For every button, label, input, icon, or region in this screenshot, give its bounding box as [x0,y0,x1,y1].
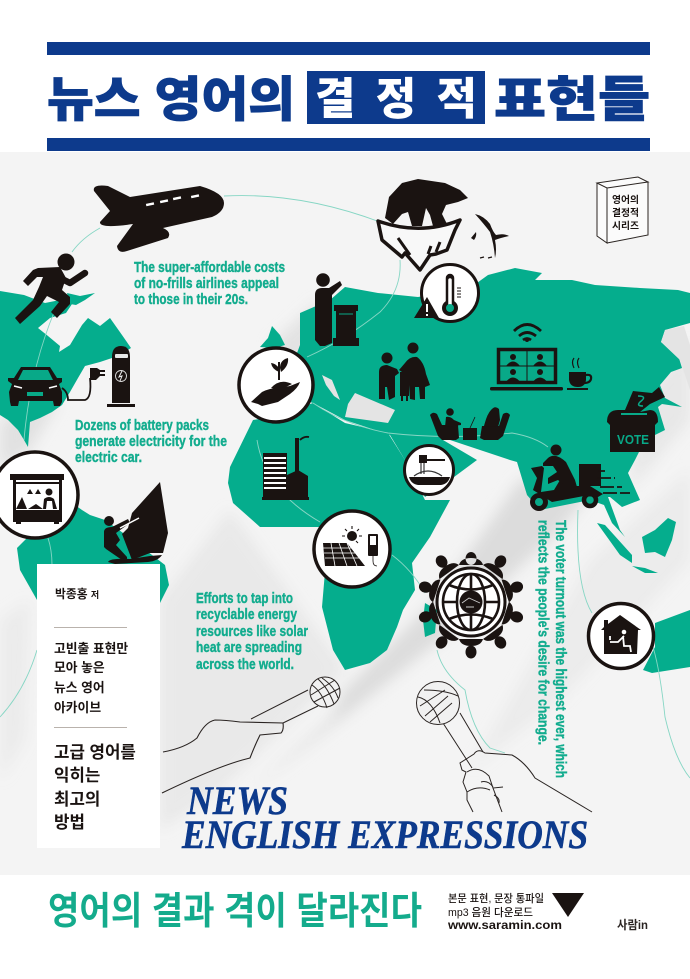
icon: vote box: VOTE [617,433,649,447]
series book: 시리즈 [612,220,639,232]
caption: electric car: generate electricity for the [75,433,227,450]
card tagline: 방법 [54,813,85,832]
icon: thermometer and warning [414,264,478,322]
icon: penguin [471,214,509,258]
madagascar [423,603,437,637]
route lines [0,196,690,778]
caption: recyclable energy: resources like solar [196,623,308,640]
caption: recyclable energy: Efforts to tap into [196,590,293,607]
icon: right microphone and hand [416,682,592,812]
card tagline: 익히는 [54,766,100,785]
icon: coffee cup [567,358,591,390]
series book: 결정적 [612,206,639,219]
africa [228,403,450,670]
card blurb: 모아 놓은 [54,660,105,675]
download info: mp3 음원 다운로드 [448,905,533,919]
caption: recyclable energy: across the world. [196,656,294,673]
icon: hand with sprout [239,348,313,422]
card tagline: 최고의 [54,790,100,809]
caption: voter turnout (vertical): The voter turnout was the highest ever, which [552,520,569,778]
icon: global handshake meeting [415,549,527,658]
english title: NEWS [186,778,288,823]
south america [17,505,169,640]
icon: charging cable [62,378,90,400]
icon: windsurfer [104,482,168,564]
icon: noodles [404,446,454,494]
icon: airplane [94,186,224,252]
series book [597,177,648,243]
icon: vote box [607,387,665,452]
caption: airlines: The super-affordable costs [134,259,285,276]
caption: airlines: to those in their 20s. [134,291,248,308]
icon: polar bear on iceberg [378,179,468,270]
icon: charging station [107,346,135,407]
icon: video call laptop and wifi [490,324,563,390]
icon: factory [262,437,309,500]
slogan: 영어의 결과 격이 달라진다 [48,891,422,933]
icon: electric car [8,367,62,406]
download info: 본문 표현, 문장 통파일 [448,891,544,905]
top title bar [47,42,650,55]
card blurb: 고빈출 표현만 [54,641,128,656]
caption: electric car: Dozens of battery packs [75,417,209,434]
card tagline [54,743,136,832]
caption: recyclable energy: recyclable energy [196,606,298,623]
english title [181,778,588,857]
icon: plug [90,368,105,380]
download arrow [552,893,584,917]
icon: people on armchairs [430,407,510,440]
borneo [642,518,676,557]
title: 결 정 적 [315,75,477,124]
caption: electric car: electric car. [75,449,142,466]
card blurb: 아카이브 [54,700,101,715]
title: 뉴스 영어의 [47,74,295,127]
card blurb [54,641,128,715]
card tagline: 고급 영어를 [54,743,136,762]
author: 박종홍 저 [55,587,99,601]
adriatic and inland seas [322,326,690,423]
card blurb: 뉴스 영어 [54,680,105,695]
icon: market stall [0,452,78,538]
title [47,71,650,127]
java [632,566,658,573]
sumatra [597,523,632,563]
caption: recyclable energy: heat are spreading [196,639,302,656]
bottom title bar [47,138,650,151]
publisher logo: 사람in [617,918,648,932]
world map [0,268,690,673]
icon: runner [15,254,85,324]
caption: airlines: of no-frills airlines appeal [134,275,279,292]
icon: work from home [588,604,654,668]
download info: www.saramin.com [447,920,562,932]
caption: recyclable energy [196,590,308,673]
eurasia [284,268,690,537]
arctic islands [67,293,95,305]
caption: voter turnout (vertical) [534,520,569,778]
icon: patient and doctor [379,342,430,401]
icon: delivery scooter [531,444,630,508]
title: 표현들 [494,74,650,127]
caption: voter turnout (vertical): reflects the people's desire for change. [534,520,552,745]
icon: solar panel and battery [314,511,390,587]
caption: electric car [75,417,227,466]
download info [447,891,562,932]
icon: speaker at podium [315,273,359,346]
english title: ENGLISH EXPRESSIONS [181,812,588,857]
caption: airlines [134,259,285,308]
icon: left microphone and hand [162,677,340,793]
background panel [0,152,690,875]
uk islands [260,326,285,348]
author card [37,564,160,848]
north america [0,291,131,447]
australia [643,610,690,673]
series book: 영어의 [612,193,639,206]
